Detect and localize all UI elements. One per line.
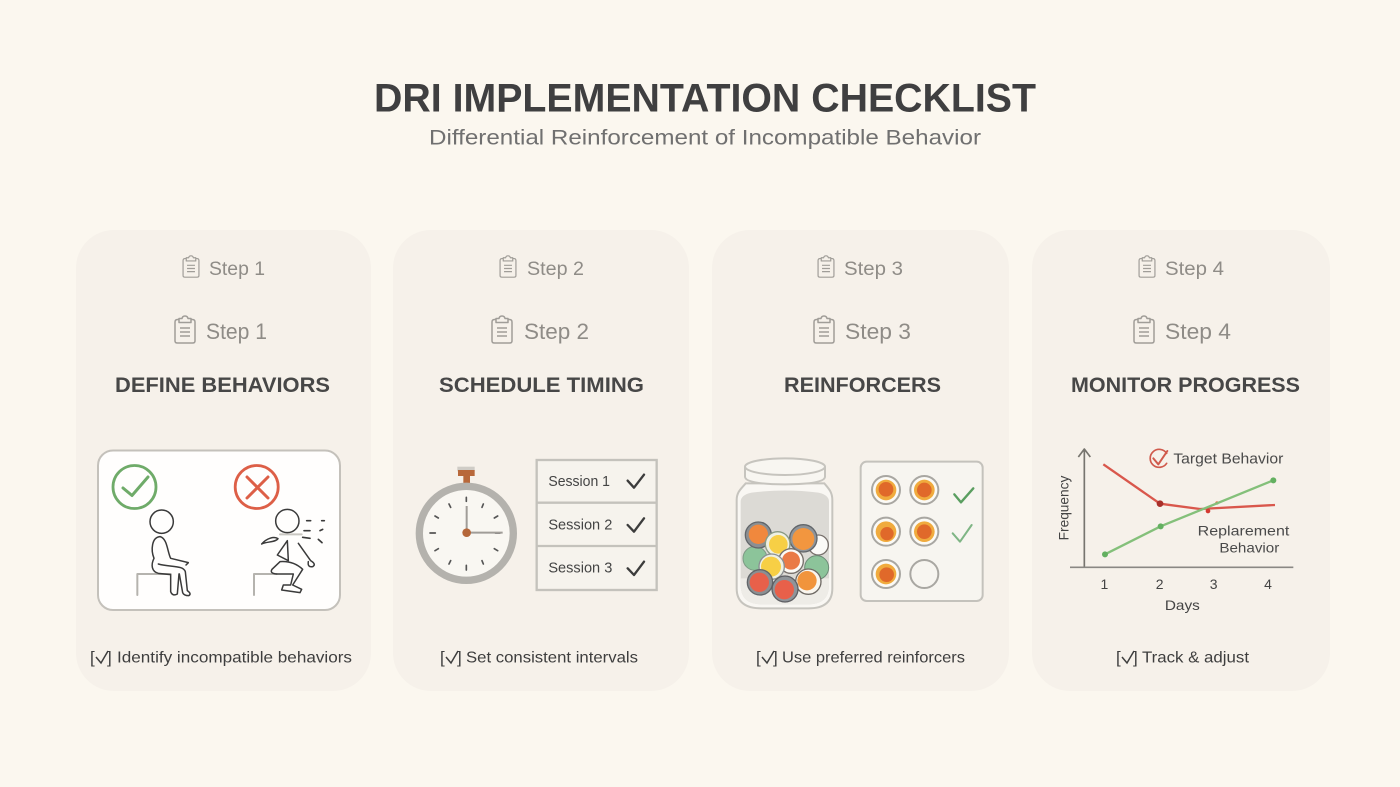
checklist item: Use preferred reinforcers: [782, 650, 965, 666]
series: target behavior: [1103, 464, 1275, 513]
checklist item: ]: [107, 648, 112, 667]
session checklist: Session 2: [548, 517, 612, 533]
checklist item: [: [90, 648, 95, 667]
session checklist: Session 1: [548, 474, 610, 490]
x axis labels: 1: [1100, 576, 1108, 592]
heading: schedule timing: SCHEDULE TIMING: [439, 373, 644, 397]
line chart: frequency over days: Frequency: [1055, 476, 1071, 540]
step label small 1: [183, 256, 265, 280]
checklist item: Track & adjust: [1142, 650, 1250, 666]
label: replacement behavior: Behavior: [1219, 539, 1280, 555]
x axis labels: 3: [1210, 576, 1218, 592]
icon: stopwatch: [419, 467, 513, 580]
title: DRI IMPLEMENTATION CHECKLIST: [374, 76, 1036, 120]
subtitle: Differential Reinforcement of Incompatible Behavior: [429, 126, 981, 150]
heading: reinforcers: REINFORCERS: [784, 373, 941, 397]
legend: target behavior: Target Behavior: [1173, 450, 1283, 467]
checklist item: [: [1116, 648, 1121, 667]
label: replacement behavior: Replarement: [1198, 523, 1289, 539]
step label small 4: [1139, 256, 1224, 280]
panel: step 1 define behaviors: [76, 230, 371, 691]
step label small 2: Step 2: [527, 259, 584, 280]
checklist item: [: [440, 648, 445, 667]
checklist item: ]: [457, 648, 462, 667]
icon: seated calm person: [137, 510, 190, 596]
checklist item: Identify incompatible behaviors: [117, 650, 352, 666]
token board: [861, 462, 983, 601]
step label large 2: [492, 316, 589, 344]
step label large 4: Step 4: [1165, 319, 1231, 344]
step label large 4: [1134, 316, 1231, 344]
series: replacement behavior: [1102, 477, 1276, 557]
step label small 2: [500, 256, 584, 280]
panel: step 3 reinforcers: [712, 230, 1009, 691]
step label large 3: [814, 316, 911, 344]
icon: green check: [113, 466, 156, 508]
step label large 2: Step 2: [524, 319, 589, 344]
heading: monitor progress: MONITOR PROGRESS: [1071, 373, 1300, 397]
checklist item: ]: [773, 648, 778, 667]
icon: reinforcer jar: [737, 458, 832, 608]
panel: step 4 monitor progress: [1032, 230, 1330, 691]
checklist item: Set consistent intervals: [466, 650, 638, 666]
icon: disruptive person: [254, 509, 324, 595]
step label large 1: Step 1: [206, 319, 267, 344]
icon: red cross: [235, 466, 278, 508]
line chart: frequency over days: [1055, 449, 1293, 613]
panel: step 2 schedule timing: [393, 230, 689, 691]
x axis labels: [1100, 576, 1272, 613]
step label large 1: [175, 316, 267, 344]
label: replacement behavior: [1198, 523, 1289, 555]
illustration: compatible vs incompatible behavior: [98, 450, 340, 610]
session checklist: [537, 460, 657, 590]
step label small 4: Step 4: [1165, 259, 1224, 280]
step label small 3: Step 3: [844, 259, 903, 280]
checklist item: [1116, 648, 1250, 667]
step label small 1: Step 1: [209, 259, 265, 280]
x axis labels: 2: [1156, 576, 1164, 592]
x axis labels: 4: [1264, 576, 1272, 592]
x axis labels: Days: [1165, 597, 1200, 613]
session checklist: Session 3: [548, 561, 612, 577]
step label small 3: [818, 256, 903, 280]
step label large 3: Step 3: [845, 319, 911, 344]
heading: define behaviors: DEFINE BEHAVIORS: [115, 373, 330, 397]
checklist item: [: [756, 648, 761, 667]
checklist item: ]: [1133, 648, 1138, 667]
